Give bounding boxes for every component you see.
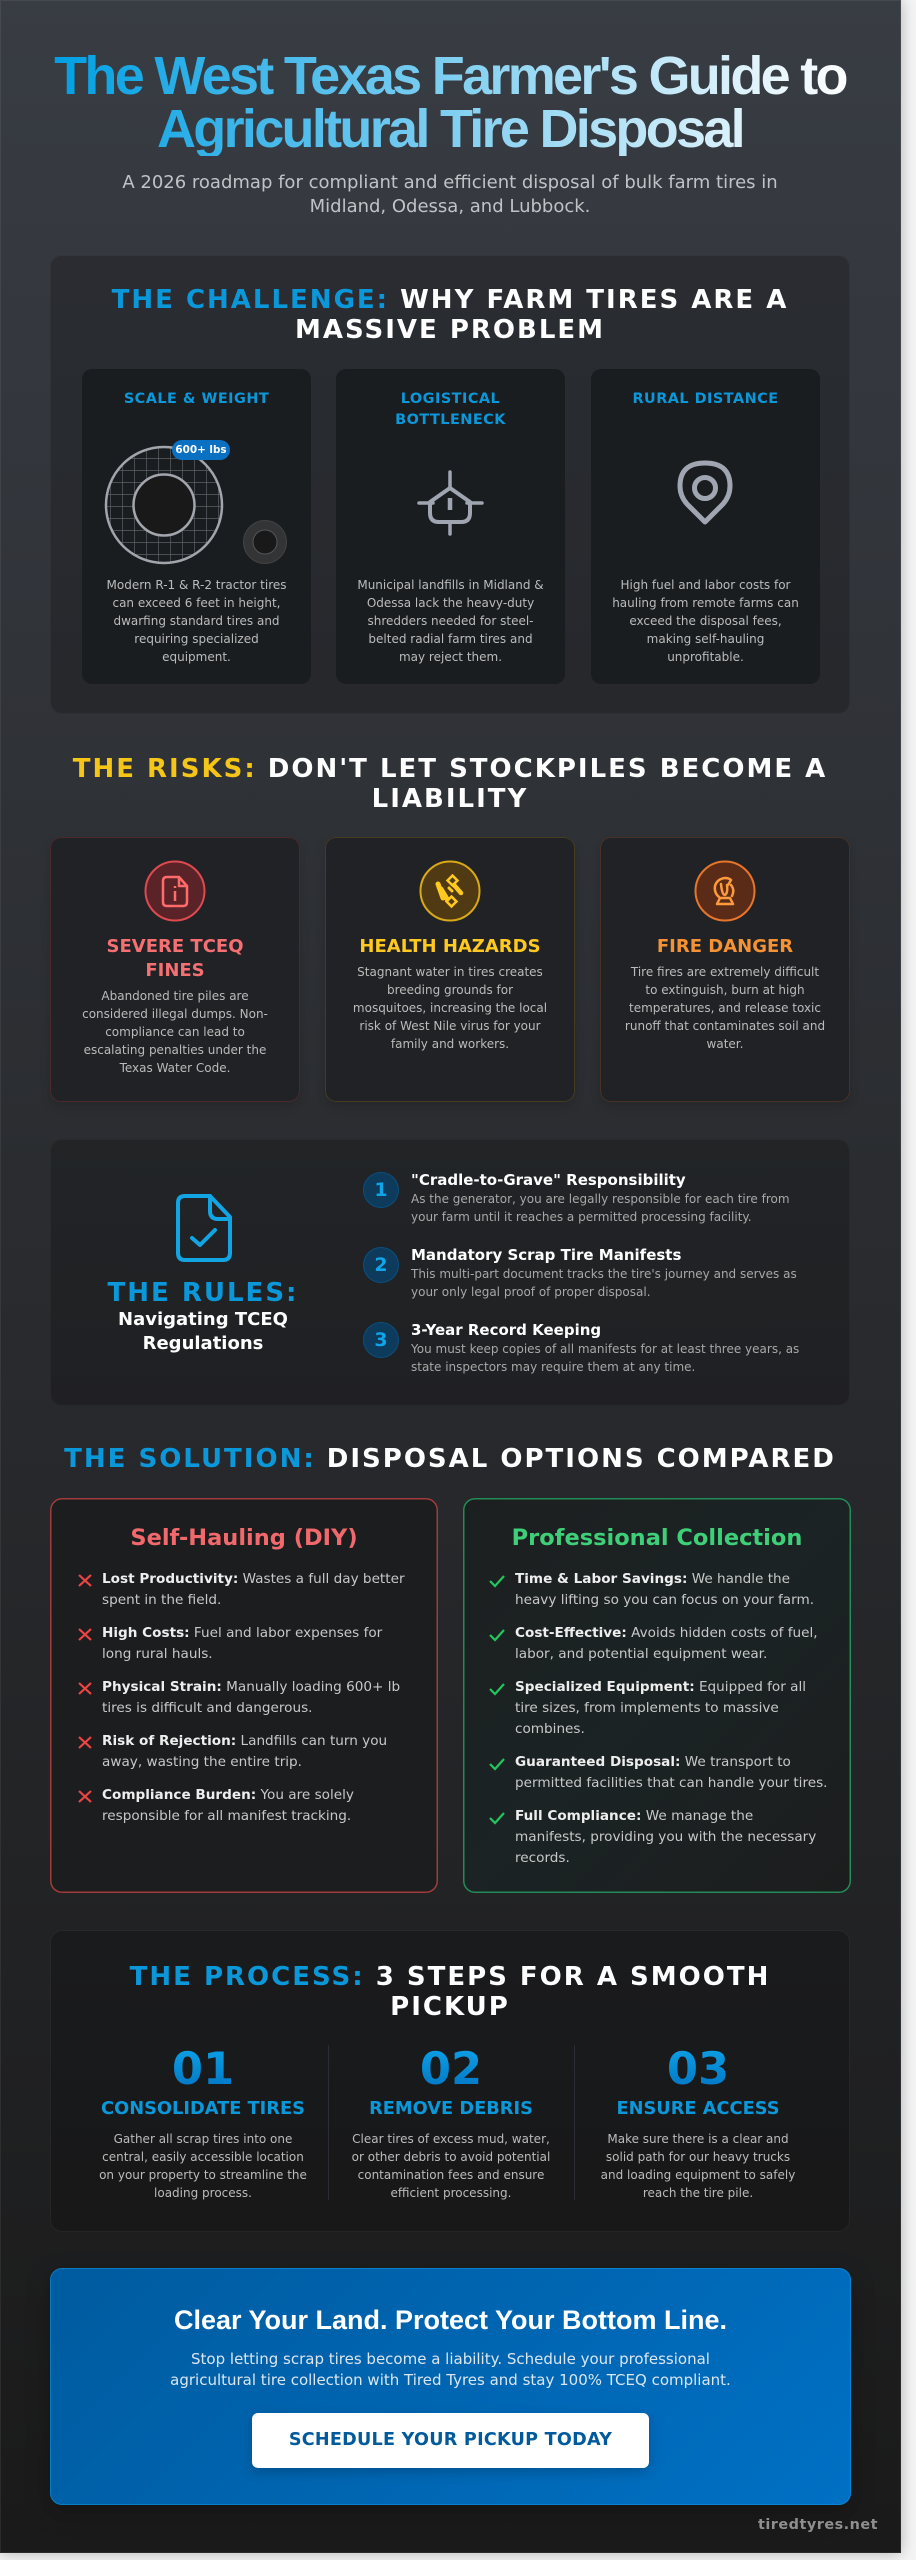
rule number 2 — [363, 1247, 399, 1283]
card text: equipment. — [162, 650, 231, 664]
card text: hauling from remote farms can — [612, 596, 799, 610]
step text: and loading equipment to safely — [601, 2168, 795, 2182]
card text: to extinguish, burn at high — [645, 983, 805, 997]
rule title: "Cradle-to-Grave" Responsibility — [411, 1171, 686, 1189]
heading: the challenge: MASSIVE PROBLEM — [295, 315, 605, 345]
card text: Municipal landfills in Midland & — [357, 578, 544, 592]
badge: 600+ lbs — [172, 440, 230, 460]
panel: professional collection — [463, 1498, 851, 1893]
icon: tire size comparison — [104, 446, 287, 564]
icon: check marks — [489, 1575, 505, 1824]
step title: ENSURE ACCESS — [616, 2098, 780, 2118]
rule number 3 — [363, 1322, 399, 1358]
sub-heading: Navigating TCEQ — [118, 1309, 288, 1330]
card text — [82, 989, 268, 1075]
step title: REMOVE DEBRIS — [369, 2098, 533, 2118]
item: manifests, providing you with the necessary — [515, 1828, 816, 1844]
icon: cross marks — [78, 1574, 92, 1803]
step text: loading process. — [154, 2186, 252, 2200]
step number: 02 — [420, 2042, 482, 2094]
item: Guaranteed Disposal: We transport to — [515, 1754, 791, 1770]
icon: document with check — [176, 1194, 232, 1262]
subtitle: Midland, Odessa, and Lubbock. — [310, 196, 590, 216]
card text — [353, 965, 547, 1051]
heading: the risks: THE RISKS: DON'T LET STOCKPILES BECOME A — [73, 754, 827, 784]
card title — [106, 936, 244, 980]
rule body — [410, 1267, 797, 1299]
item — [515, 1806, 828, 1868]
rule number 3: 3 — [374, 1329, 388, 1351]
panel: the process — [50, 1930, 850, 2232]
card text — [357, 578, 544, 664]
item: long rural hauls. — [102, 1646, 213, 1662]
rule 1 text — [411, 1171, 790, 1224]
step text: solid path for our heavy trucks — [606, 2150, 790, 2164]
card text: Texas Water Code. — [120, 1061, 230, 1075]
rules label — [108, 1278, 298, 1354]
rule number 2: 2 — [374, 1254, 388, 1276]
item: Risk of Rejection: Landfills can turn you — [102, 1732, 387, 1748]
heading: the challenge: THE CHALLENGE: WHY FARM TIRES ARE A — [112, 285, 788, 315]
card text: shredders needed for steel- — [367, 614, 534, 628]
call to action banner — [50, 2268, 851, 2505]
step 3 — [573, 2042, 823, 2202]
item: away, wasting the entire trip. — [102, 1754, 302, 1770]
card: fire danger — [600, 837, 850, 1102]
card title: RURAL DISTANCE — [632, 390, 779, 406]
item: Time & Labor Savings: We handle the — [515, 1570, 790, 1586]
card text: compliance can lead to — [105, 1025, 245, 1039]
item — [515, 1678, 806, 1736]
rule number 1 — [363, 1172, 399, 1208]
step text — [573, 2130, 823, 2202]
card text: may reject them. — [399, 650, 502, 664]
card text: Tire fires are extremely difficult — [631, 965, 819, 979]
item — [515, 1570, 814, 1608]
subtitle — [122, 172, 778, 216]
item — [102, 1786, 354, 1824]
rule title: Mandatory Scrap Tire Manifests — [411, 1246, 681, 1264]
step text: reach the tire pile. — [643, 2186, 753, 2200]
rule body — [411, 1342, 799, 1374]
title — [50, 50, 850, 156]
card title — [395, 390, 506, 428]
rule title: 3-Year Record Keeping — [411, 1321, 601, 1339]
title: The West Texas Farmer's Guide to — [54, 46, 846, 106]
card text: temperatures, and release toxic — [629, 1001, 821, 1015]
card title: FINES — [145, 960, 205, 980]
footer url: tiredtyres.net — [758, 2517, 878, 2533]
panel title: Self-Hauling (DIY) — [130, 1525, 358, 1551]
item: tire sizes, from implements to massive — [515, 1700, 779, 1716]
card: scale and weight — [82, 369, 311, 684]
cta text: agricultural tire collection with Tired Tyres and stay 100% TCEQ compliant. — [170, 2370, 731, 2388]
heading: the rules: THE RULES: — [108, 1278, 298, 1308]
heading: the risks — [72, 754, 827, 814]
item list — [515, 1570, 828, 1866]
card text: dwarfing standard tires and — [113, 614, 280, 628]
card text: unprofitable. — [667, 650, 744, 664]
card text: mosquitoes, increasing the local — [353, 1001, 547, 1015]
item — [515, 1624, 818, 1662]
cta text: Stop letting scrap tires become a liability. Schedule your professional — [191, 2350, 710, 2368]
step 1 — [78, 2042, 328, 2202]
icon: fine document — [144, 860, 206, 922]
item: High Costs: Fuel and labor expenses for — [102, 1624, 382, 1640]
card title: HEALTH HAZARDS — [359, 936, 541, 956]
step text: Clear tires of excess mud, water, — [352, 2132, 550, 2146]
card title: SCALE & WEIGHT — [124, 390, 269, 406]
step text: contamination fees and ensure — [358, 2168, 544, 2182]
title: Agricultural Tire Disposal — [157, 99, 743, 159]
step text: efficient processing. — [391, 2186, 511, 2200]
heading: the process: PICKUP — [390, 1992, 510, 2022]
sub-heading — [118, 1309, 288, 1354]
rule body: This multi-part document tracks the tire's journey and serves as — [411, 1267, 797, 1281]
card text — [625, 965, 825, 1051]
step text: Gather all scrap tires into one — [114, 2132, 292, 2146]
item — [102, 1732, 387, 1770]
step text: on your property to streamline the — [99, 2168, 307, 2182]
card text: runoff that contaminates soil and — [625, 1019, 825, 1033]
rule number 1: 1 — [374, 1179, 388, 1201]
cta text — [50, 2348, 851, 2390]
item — [515, 1754, 828, 1790]
card text: High fuel and labor costs for — [620, 578, 790, 592]
icon: shredder crosshair — [417, 470, 484, 536]
sub-heading: Regulations — [143, 1333, 263, 1354]
step number — [573, 2042, 823, 2094]
item: heavy lifting so you can focus on your farm. — [515, 1592, 814, 1608]
heading: the process: THE PROCESS: 3 STEPS FOR A SMOOTH — [130, 1962, 770, 1992]
card text: breeding grounds for — [387, 983, 513, 997]
item — [102, 1678, 400, 1716]
item: Compliance Burden: You are solely — [102, 1786, 354, 1802]
item: records. — [515, 1850, 570, 1866]
step number — [78, 2042, 328, 2094]
rule 2 text — [410, 1246, 797, 1299]
step text — [326, 2130, 576, 2202]
step text — [78, 2130, 328, 2202]
card text: Abandoned tire piles are — [101, 989, 249, 1003]
panel: the challenge — [50, 255, 850, 714]
step text: or other debris to avoid potential — [352, 2150, 550, 2164]
panel: the rules — [50, 1139, 850, 1406]
step text: central, easily accessible location — [102, 2150, 304, 2164]
rule body: As the generator, you are legally responsible for each tire from — [411, 1192, 790, 1206]
rule body — [411, 1192, 790, 1224]
card: health hazards — [325, 837, 575, 1102]
panel: self-hauling — [50, 1498, 438, 1893]
step number: 01 — [172, 2042, 234, 2094]
card text — [106, 578, 286, 664]
item: permitted facilities that can handle your tires. — [515, 1774, 828, 1790]
item — [102, 1570, 405, 1608]
cta button: SCHEDULE YOUR PICKUP TODAY — [289, 2430, 612, 2450]
item: Specialized Equipment: Equipped for all — [515, 1678, 806, 1694]
rule body: your only legal proof of proper disposal. — [411, 1285, 651, 1299]
card: rural distance — [591, 369, 820, 684]
card text: Modern R-1 & R-2 tractor tires — [106, 578, 286, 592]
card text: can exceed 6 feet in height, — [112, 596, 280, 610]
subtitle: A 2026 roadmap for compliant and efficient disposal of bulk farm tires in — [122, 172, 778, 192]
item: responsible for all manifest tracking. — [102, 1808, 351, 1824]
card: logistical bottleneck — [336, 369, 565, 684]
cta headline: Clear Your Land. Protect Your Bottom Line. — [174, 2305, 727, 2335]
step text: Make sure there is a clear and — [607, 2132, 789, 2146]
item: spent in the field. — [102, 1592, 221, 1608]
icon: burning tire — [694, 860, 756, 922]
card title: LOGISTICAL — [401, 390, 500, 406]
icon: mosquito hazard — [420, 860, 480, 922]
card title: FIRE DANGER — [657, 936, 793, 956]
step number: 03 — [667, 2042, 729, 2094]
card text: risk of West Nile virus for your — [359, 1019, 541, 1033]
heading: the risks: LIABILITY — [372, 784, 528, 814]
badge: 600+ lbs: 600+ lbs — [175, 444, 227, 456]
step number — [326, 2042, 576, 2094]
cta button — [252, 2413, 649, 2468]
heading: the solution: THE SOLUTION: DISPOSAL OPTIONS COMPARED — [64, 1444, 836, 1474]
card text — [612, 578, 799, 664]
card text: Odessa lack the heavy-duty — [367, 596, 534, 610]
item: tires is difficult and dangerous. — [102, 1700, 312, 1716]
heading: the challenge — [112, 285, 788, 345]
card text: escalating penalties under the — [84, 1043, 266, 1057]
item — [102, 1624, 382, 1662]
step title: CONSOLIDATE TIRES — [101, 2098, 305, 2118]
item: Full Compliance: We manage the — [515, 1808, 753, 1824]
panel title: Professional Collection — [512, 1525, 802, 1551]
rule 3 text — [411, 1321, 799, 1374]
item: labor, and potential equipment wear. — [515, 1646, 767, 1662]
item: Cost-Effective: Avoids hidden costs of fuel, — [515, 1624, 818, 1640]
card title: SEVERE TCEQ — [106, 936, 244, 956]
rule body: You must keep copies of all manifests for at least three years, as — [411, 1342, 799, 1356]
heading: the process — [50, 1962, 850, 2022]
step 2 — [326, 2042, 576, 2202]
card text: water. — [707, 1037, 743, 1051]
card text: Stagnant water in tires creates — [357, 965, 543, 979]
card text: considered illegal dumps. Non- — [82, 1007, 268, 1021]
item list — [102, 1570, 405, 1824]
card text: exceed the disposal fees, — [629, 614, 782, 628]
card title: BOTTLENECK — [395, 412, 506, 428]
card text: requiring specialized — [134, 632, 259, 646]
item: Physical Strain: Manually loading 600+ lb — [102, 1678, 400, 1694]
item: combines. — [515, 1720, 585, 1736]
icon: map pin — [678, 460, 732, 524]
item: Lost Productivity: Wastes a full day better — [102, 1570, 405, 1586]
rule body: your farm until it reaches a permitted processing facility. — [411, 1210, 752, 1224]
card text: family and workers. — [391, 1037, 509, 1051]
rule body: state inspectors may require them at any time. — [411, 1360, 695, 1374]
card text: belted radial farm tires and — [368, 632, 533, 646]
card text: making self-hauling — [647, 632, 764, 646]
card: severe TCEQ fines — [50, 837, 300, 1102]
